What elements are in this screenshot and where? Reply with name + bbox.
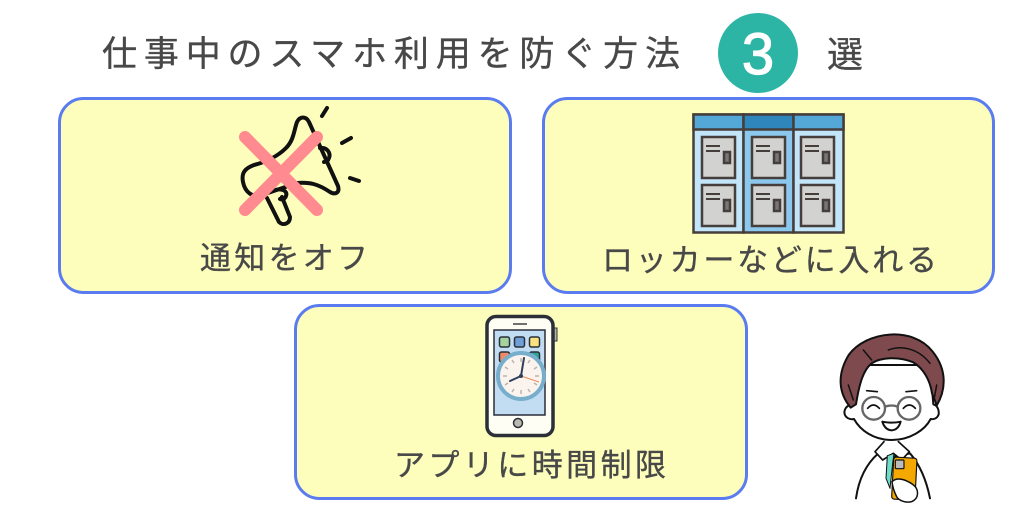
panel: locker xyxy=(544,98,994,292)
collar and tie xyxy=(875,442,909,460)
title suffix: 選 xyxy=(827,34,863,75)
panel: app time limit xyxy=(296,306,746,498)
phone xyxy=(892,457,917,500)
hand xyxy=(892,479,918,502)
body xyxy=(856,453,930,498)
label: 通知をオフ xyxy=(200,241,368,276)
hair xyxy=(841,334,944,408)
icon: lockers xyxy=(694,114,844,232)
icon: megaphone crossed out xyxy=(243,108,359,224)
character: smiling man with phone xyxy=(841,334,944,502)
panel: notifications off xyxy=(60,98,510,292)
title: 仕事中のスマホ利用を防ぐ方法 xyxy=(102,35,680,74)
icon: phone with clock xyxy=(487,316,557,436)
number badge xyxy=(718,13,798,93)
glasses xyxy=(862,397,920,420)
number badge: 3 xyxy=(742,22,774,87)
head xyxy=(844,365,939,440)
mouth xyxy=(882,422,901,430)
label: アプリに時間制限 xyxy=(394,448,666,483)
eyes and brows xyxy=(867,391,917,408)
label: ロッカーなどに入れる xyxy=(602,243,937,278)
